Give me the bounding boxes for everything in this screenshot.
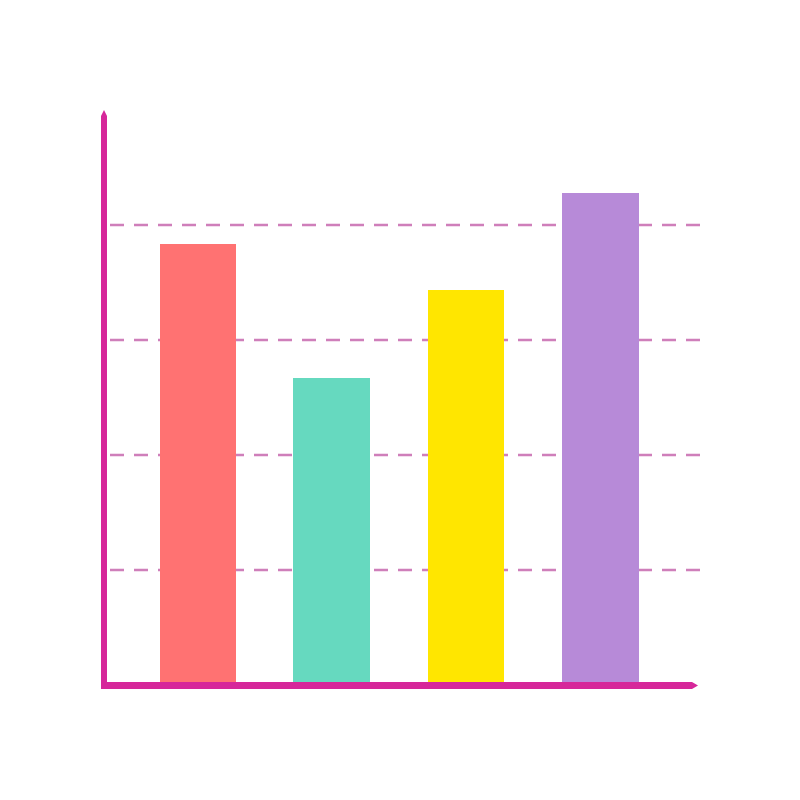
y axis xyxy=(101,110,107,689)
bar: red xyxy=(160,244,236,684)
x axis xyxy=(101,682,698,689)
axes xyxy=(101,110,698,689)
bars xyxy=(160,193,639,684)
bar: purple xyxy=(562,193,639,684)
bar: teal xyxy=(293,378,370,684)
bar: yellow xyxy=(428,290,504,684)
